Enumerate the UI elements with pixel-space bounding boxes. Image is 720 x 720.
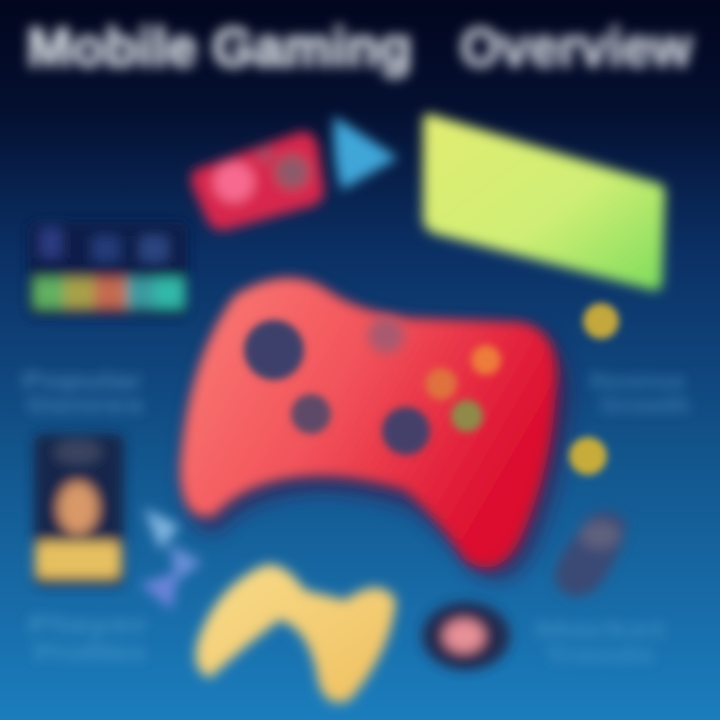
text block: left upper caption	[22, 368, 144, 417]
text block: right lower caption: Market	[535, 619, 666, 641]
text block: right lower caption	[535, 619, 666, 667]
text block: left lower caption: Profiles	[34, 640, 146, 665]
text block: right upper caption	[590, 371, 690, 417]
text block: left lower caption: Player	[28, 612, 149, 637]
icon: dark round gamepad	[422, 602, 510, 670]
icon: yellow coin lower	[569, 437, 607, 475]
panel: green screen	[423, 114, 665, 290]
icon: centre button	[368, 317, 404, 353]
icon: action buttons	[425, 345, 501, 432]
text block: right upper caption: Growth	[600, 395, 690, 417]
illustration: red game controller	[180, 278, 570, 580]
text block: left upper caption: Popular	[22, 368, 143, 393]
icon: pink game card	[191, 132, 324, 230]
title: Mobile Gaming	[27, 16, 412, 78]
title: Overview	[460, 16, 692, 78]
icon: right thumbstick	[382, 407, 430, 455]
panel: colour bar chart	[28, 222, 188, 317]
illustration: yellow game controller	[196, 564, 396, 702]
icon: yellow coin upper	[583, 303, 619, 339]
icon: lower thumbstick	[291, 394, 331, 434]
text block: right lower caption: Trends	[545, 645, 655, 667]
title	[27, 16, 692, 78]
icon: left thumbstick	[244, 320, 304, 380]
text block: left lower caption	[28, 612, 149, 665]
icon: blue arrows	[140, 508, 202, 610]
icon: dark capsule device	[555, 511, 626, 596]
icon: phone with character	[34, 434, 124, 586]
text block: left upper caption: Genres	[26, 395, 144, 417]
text block: right upper caption: Revenue	[590, 371, 685, 393]
icon: blue play arrow	[334, 116, 398, 190]
